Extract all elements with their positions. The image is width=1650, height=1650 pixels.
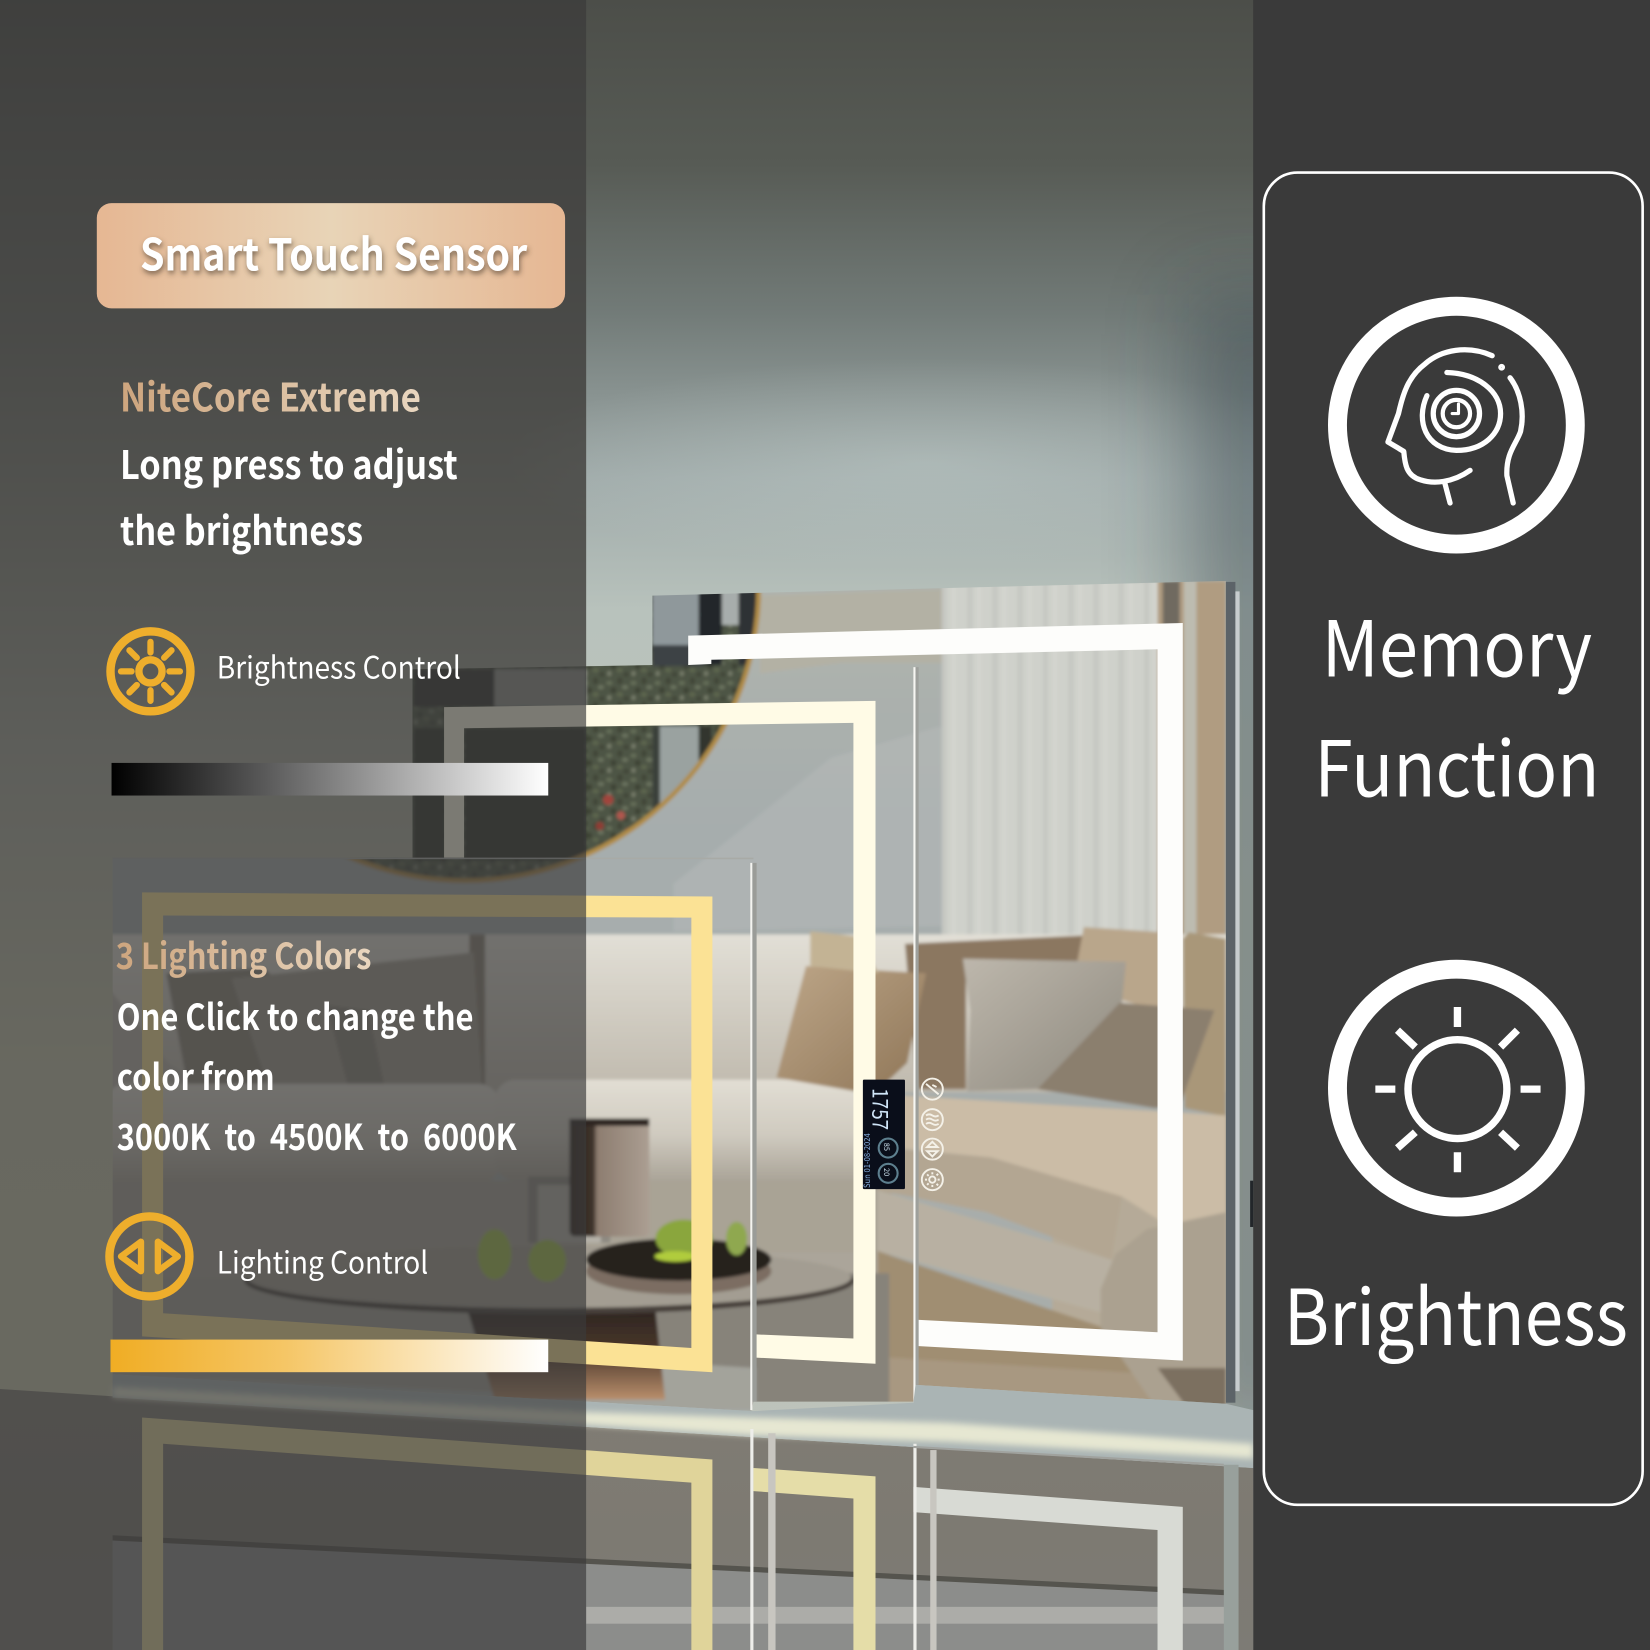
brightness gradient bar <box>112 763 548 796</box>
text block: 3 Lighting Colors: 3 Lighting Colors <box>116 929 371 980</box>
heading: Memory Function <box>1314 589 1599 820</box>
front mirror top edge <box>113 858 753 859</box>
badge: Smart Touch Sensor <box>97 203 565 308</box>
floor <box>0 1389 1253 1650</box>
text block: NiteCore Extreme: NiteCore Extreme <box>120 367 421 423</box>
feature card outline <box>1264 173 1643 1505</box>
light frame: back mirror white <box>688 623 1183 1361</box>
heading: Memory Function: Function <box>1314 709 1599 820</box>
light frame: front mirror warm yellow <box>142 892 712 1372</box>
digital display panel with clock <box>861 1080 905 1189</box>
badge: Smart Touch Sensor: Smart Touch Sensor <box>140 219 528 283</box>
right dark panel <box>1253 0 1650 1650</box>
text block: 3 Lighting Colors: color from <box>117 1050 275 1101</box>
digital display panel with clock: Sun 01-08-2024 <box>861 1133 873 1188</box>
mirror glass reflecting living room scene <box>112 581 1226 1411</box>
touch icons on mirror <box>922 1079 943 1190</box>
floor glow under mirrors <box>113 1374 1253 1468</box>
digital display panel with clock: 1757 <box>865 1088 897 1130</box>
mirror edge strips <box>750 582 1253 1410</box>
text block: 3 Lighting Colors: One Click to change the <box>117 990 474 1041</box>
text block: NiteCore Extreme: the brightness <box>120 501 363 557</box>
coffee table <box>244 1119 854 1400</box>
text block: NiteCore Extreme: Long press to adjust <box>120 435 458 491</box>
icon: brightness control <box>110 631 190 711</box>
text block: 3 Lighting Colors: 3000K to 4500K to 6000K <box>117 1110 517 1161</box>
label: Brightness Control: Brightness Control <box>217 644 461 688</box>
light frame: middle mirror warm white <box>444 701 876 1364</box>
sofa <box>105 927 1231 1421</box>
label: Lighting Control: Lighting Control <box>217 1238 428 1282</box>
digital display panel with clock: 85 <box>881 1143 892 1151</box>
left translucent overlay panel <box>0 0 586 1650</box>
text block: NiteCore Extreme <box>120 367 458 557</box>
round wall mirror <box>348 592 763 884</box>
floor reflection of mirrors <box>113 1417 1239 1650</box>
icon: brightness sun <box>1337 969 1575 1207</box>
icon: memory head <box>1337 306 1575 544</box>
digital display panel with clock: 20 <box>881 1168 892 1176</box>
text block: 3 Lighting Colors <box>116 929 517 1161</box>
icon: lighting control <box>109 1216 189 1296</box>
heading: Memory Function: Memory <box>1322 589 1592 700</box>
colour temperature gradient bar <box>110 1340 548 1372</box>
